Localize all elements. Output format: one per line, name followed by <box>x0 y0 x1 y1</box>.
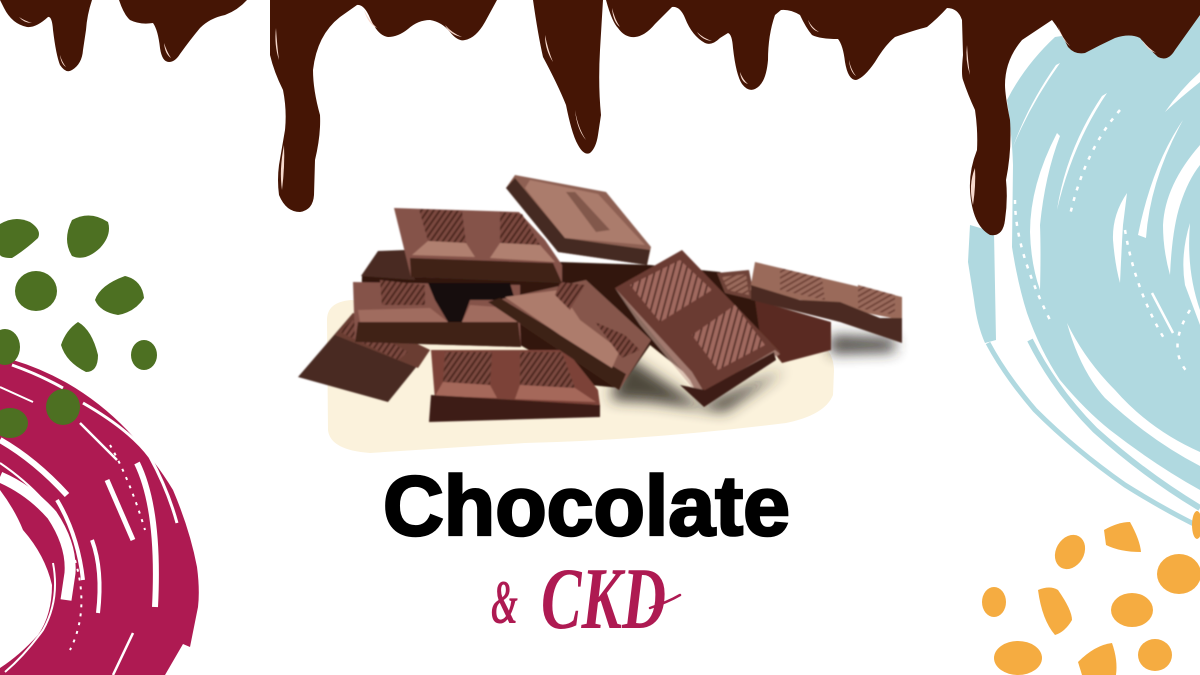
small wedge piece <box>717 270 755 300</box>
centre diagonal piece <box>488 280 651 390</box>
right background piece <box>755 300 831 363</box>
orange seed dots <box>982 511 1200 675</box>
bottom left piece <box>298 313 430 402</box>
title: Chocolate: Chocolate <box>383 459 790 553</box>
subtitle: & CKD <box>491 551 680 648</box>
far right piece <box>750 262 902 343</box>
magenta brush swirl <box>0 360 199 675</box>
shaded mass under pile <box>360 250 760 388</box>
subtitle: & CKD: & <box>491 569 518 637</box>
front bottom piece <box>429 350 600 422</box>
chocolate bar pile <box>298 175 902 422</box>
green seed dots <box>0 215 157 438</box>
right diagonal piece <box>615 250 780 407</box>
swirl centre opening <box>0 490 52 668</box>
ground shadows <box>610 335 895 412</box>
subtitle: & CKD: CKD <box>541 551 666 648</box>
cream blob behind chocolate <box>327 300 834 453</box>
back small piece <box>361 250 415 280</box>
top right piece <box>506 175 651 265</box>
blue brush swirl <box>968 15 1200 527</box>
upper left bar <box>394 208 562 283</box>
middle left piece <box>353 280 521 347</box>
melted chocolate drips <box>0 0 1200 235</box>
